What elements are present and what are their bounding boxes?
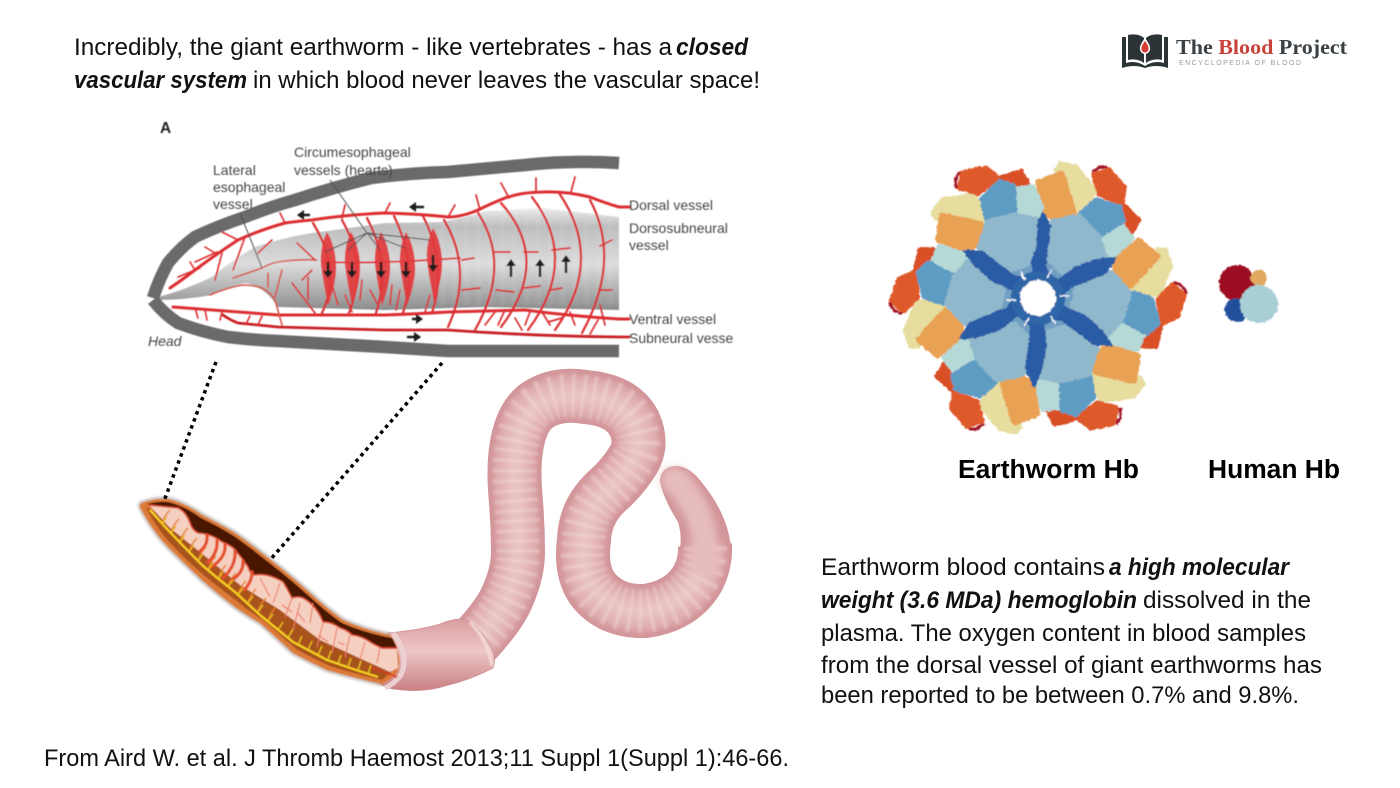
text block: earthworm blood description: Earthworm blood contains	[821, 554, 1105, 581]
text block: earthworm blood description: dissolved in the	[1143, 587, 1311, 614]
red vessels	[170, 177, 629, 337]
molecule: human hemoglobin	[1219, 265, 1278, 323]
orange fringe	[162, 510, 276, 621]
yellow rungs	[162, 517, 371, 674]
grey outline halo	[140, 499, 390, 684]
gut wall line	[148, 505, 397, 648]
yellow nerve cord	[150, 510, 378, 677]
text block: earthworm blood description: from the dorsal vessel of giant earthworms has	[821, 652, 1322, 679]
anatomy labels: Head	[148, 333, 183, 349]
anatomy labels	[148, 144, 734, 349]
horizontal cross vessel	[322, 258, 460, 262]
text block: earthworm blood description: weight (3.6 MDa) hemoglobin	[821, 587, 1137, 614]
outer wall	[140, 499, 399, 684]
segmental vessels	[444, 193, 604, 333]
lateral esophageal vessel	[233, 260, 317, 278]
logo: The Blood Project	[1122, 34, 1348, 68]
worm tail base	[660, 466, 731, 548]
anatomy labels: Circumesophageal	[294, 144, 411, 160]
worm tail shading	[674, 480, 705, 565]
text block: earthworm blood description	[821, 554, 1322, 709]
anatomy labels: esophageal	[213, 179, 285, 195]
anatomy labels: vessel	[629, 237, 669, 253]
anatomy labels: Subneural vesse	[629, 330, 734, 346]
lower wall band	[146, 507, 396, 680]
anatomy labels: vessels (hearts)	[294, 162, 393, 178]
subneural vessel	[223, 315, 629, 337]
ventral vessel	[173, 307, 629, 319]
small side branches	[342, 177, 612, 334]
panel label A: A	[160, 120, 171, 137]
heading text: in which blood never leaves the vascular space!	[253, 67, 760, 94]
fine capillaries	[260, 578, 380, 663]
heading text: Incredibly, the giant earthworm - like vertebrates - has a	[74, 34, 673, 61]
dorsal vessel	[170, 192, 629, 288]
cut-away section	[140, 499, 399, 684]
heading text: vascular system	[74, 67, 247, 94]
anatomy labels: Dorsosubneural	[629, 220, 728, 236]
gut ring shading	[440, 219, 619, 305]
text block: earthworm blood description: plasma. The oxygen content in blood samples	[821, 620, 1306, 647]
label: Human Hb: Human Hb	[1208, 456, 1340, 484]
dark cavity	[147, 502, 397, 648]
molecule: earthworm hemoglobin	[871, 144, 1205, 452]
label: Earthworm Hb: Earthworm Hb	[958, 456, 1139, 484]
lower gut vessel	[210, 270, 282, 325]
text block: earthworm blood description: a high molecular	[1109, 554, 1291, 581]
worm collar	[380, 619, 494, 691]
anatomy labels: vessel	[213, 196, 253, 212]
citation: From Aird W. et al. J Thromb Haemost 2013;11 Suppl 1(Suppl 1):46-66.	[44, 745, 789, 772]
leader lines	[240, 180, 430, 268]
illustration: giant earthworm	[140, 396, 731, 691]
end vessels	[370, 648, 397, 677]
heading text: closed	[676, 34, 749, 61]
logo tagline: ENCYCLOPEDIA OF BLOOD	[1179, 60, 1301, 67]
heart vessels	[313, 216, 438, 313]
gut body	[155, 208, 619, 310]
direction arrows	[302, 207, 566, 337]
anatomy labels: Ventral vessel	[629, 311, 716, 327]
icon: open book with blood drop	[1122, 34, 1168, 68]
diagram: earthworm vascular anatomy	[148, 120, 734, 351]
hearts	[321, 228, 442, 306]
logo wordmark: The Blood Project	[1176, 35, 1348, 59]
worm body	[462, 396, 705, 655]
anatomy labels: Dorsal vessel	[629, 197, 713, 213]
anatomy labels: Lateral	[213, 162, 256, 178]
red heart ribs	[200, 535, 252, 590]
branches near the head	[178, 213, 315, 325]
inner pink flesh	[150, 506, 398, 672]
text block: earthworm blood description: been reported to be between 0.7% and 9.8%.	[821, 682, 1299, 709]
dotted connector lines	[164, 362, 442, 560]
body wall	[153, 162, 619, 351]
heading text	[74, 34, 760, 94]
